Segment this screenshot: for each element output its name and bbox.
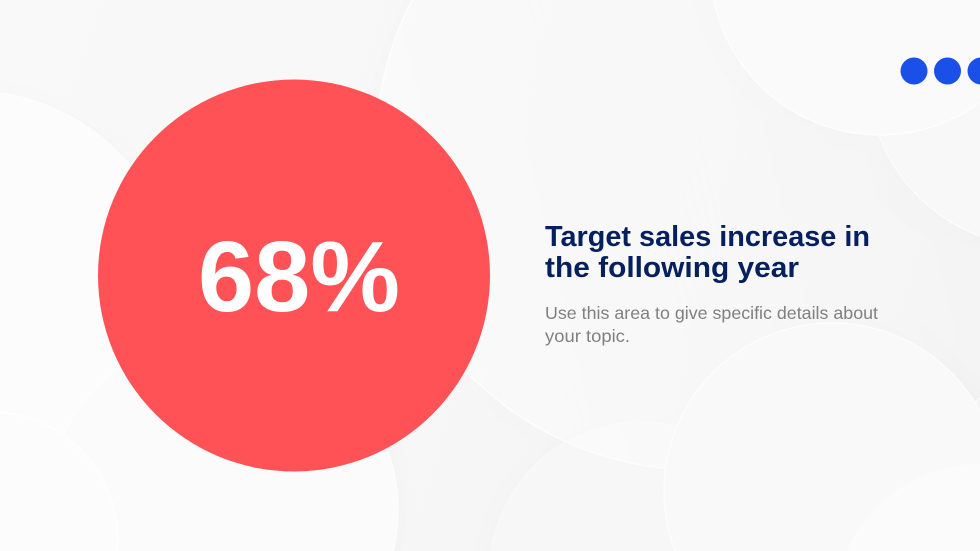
- icon: three blue dots: [900, 58, 980, 84]
- heading: Target sales increase in: [545, 221, 870, 253]
- body text: your topic.: [545, 326, 630, 346]
- red stat circle: [98, 80, 490, 472]
- stat value: 68%: [198, 221, 400, 333]
- heading: the following year: [545, 252, 799, 284]
- body text: [545, 303, 878, 346]
- body text: Use this area to give specific details about: [545, 303, 878, 323]
- heading: [545, 221, 870, 284]
